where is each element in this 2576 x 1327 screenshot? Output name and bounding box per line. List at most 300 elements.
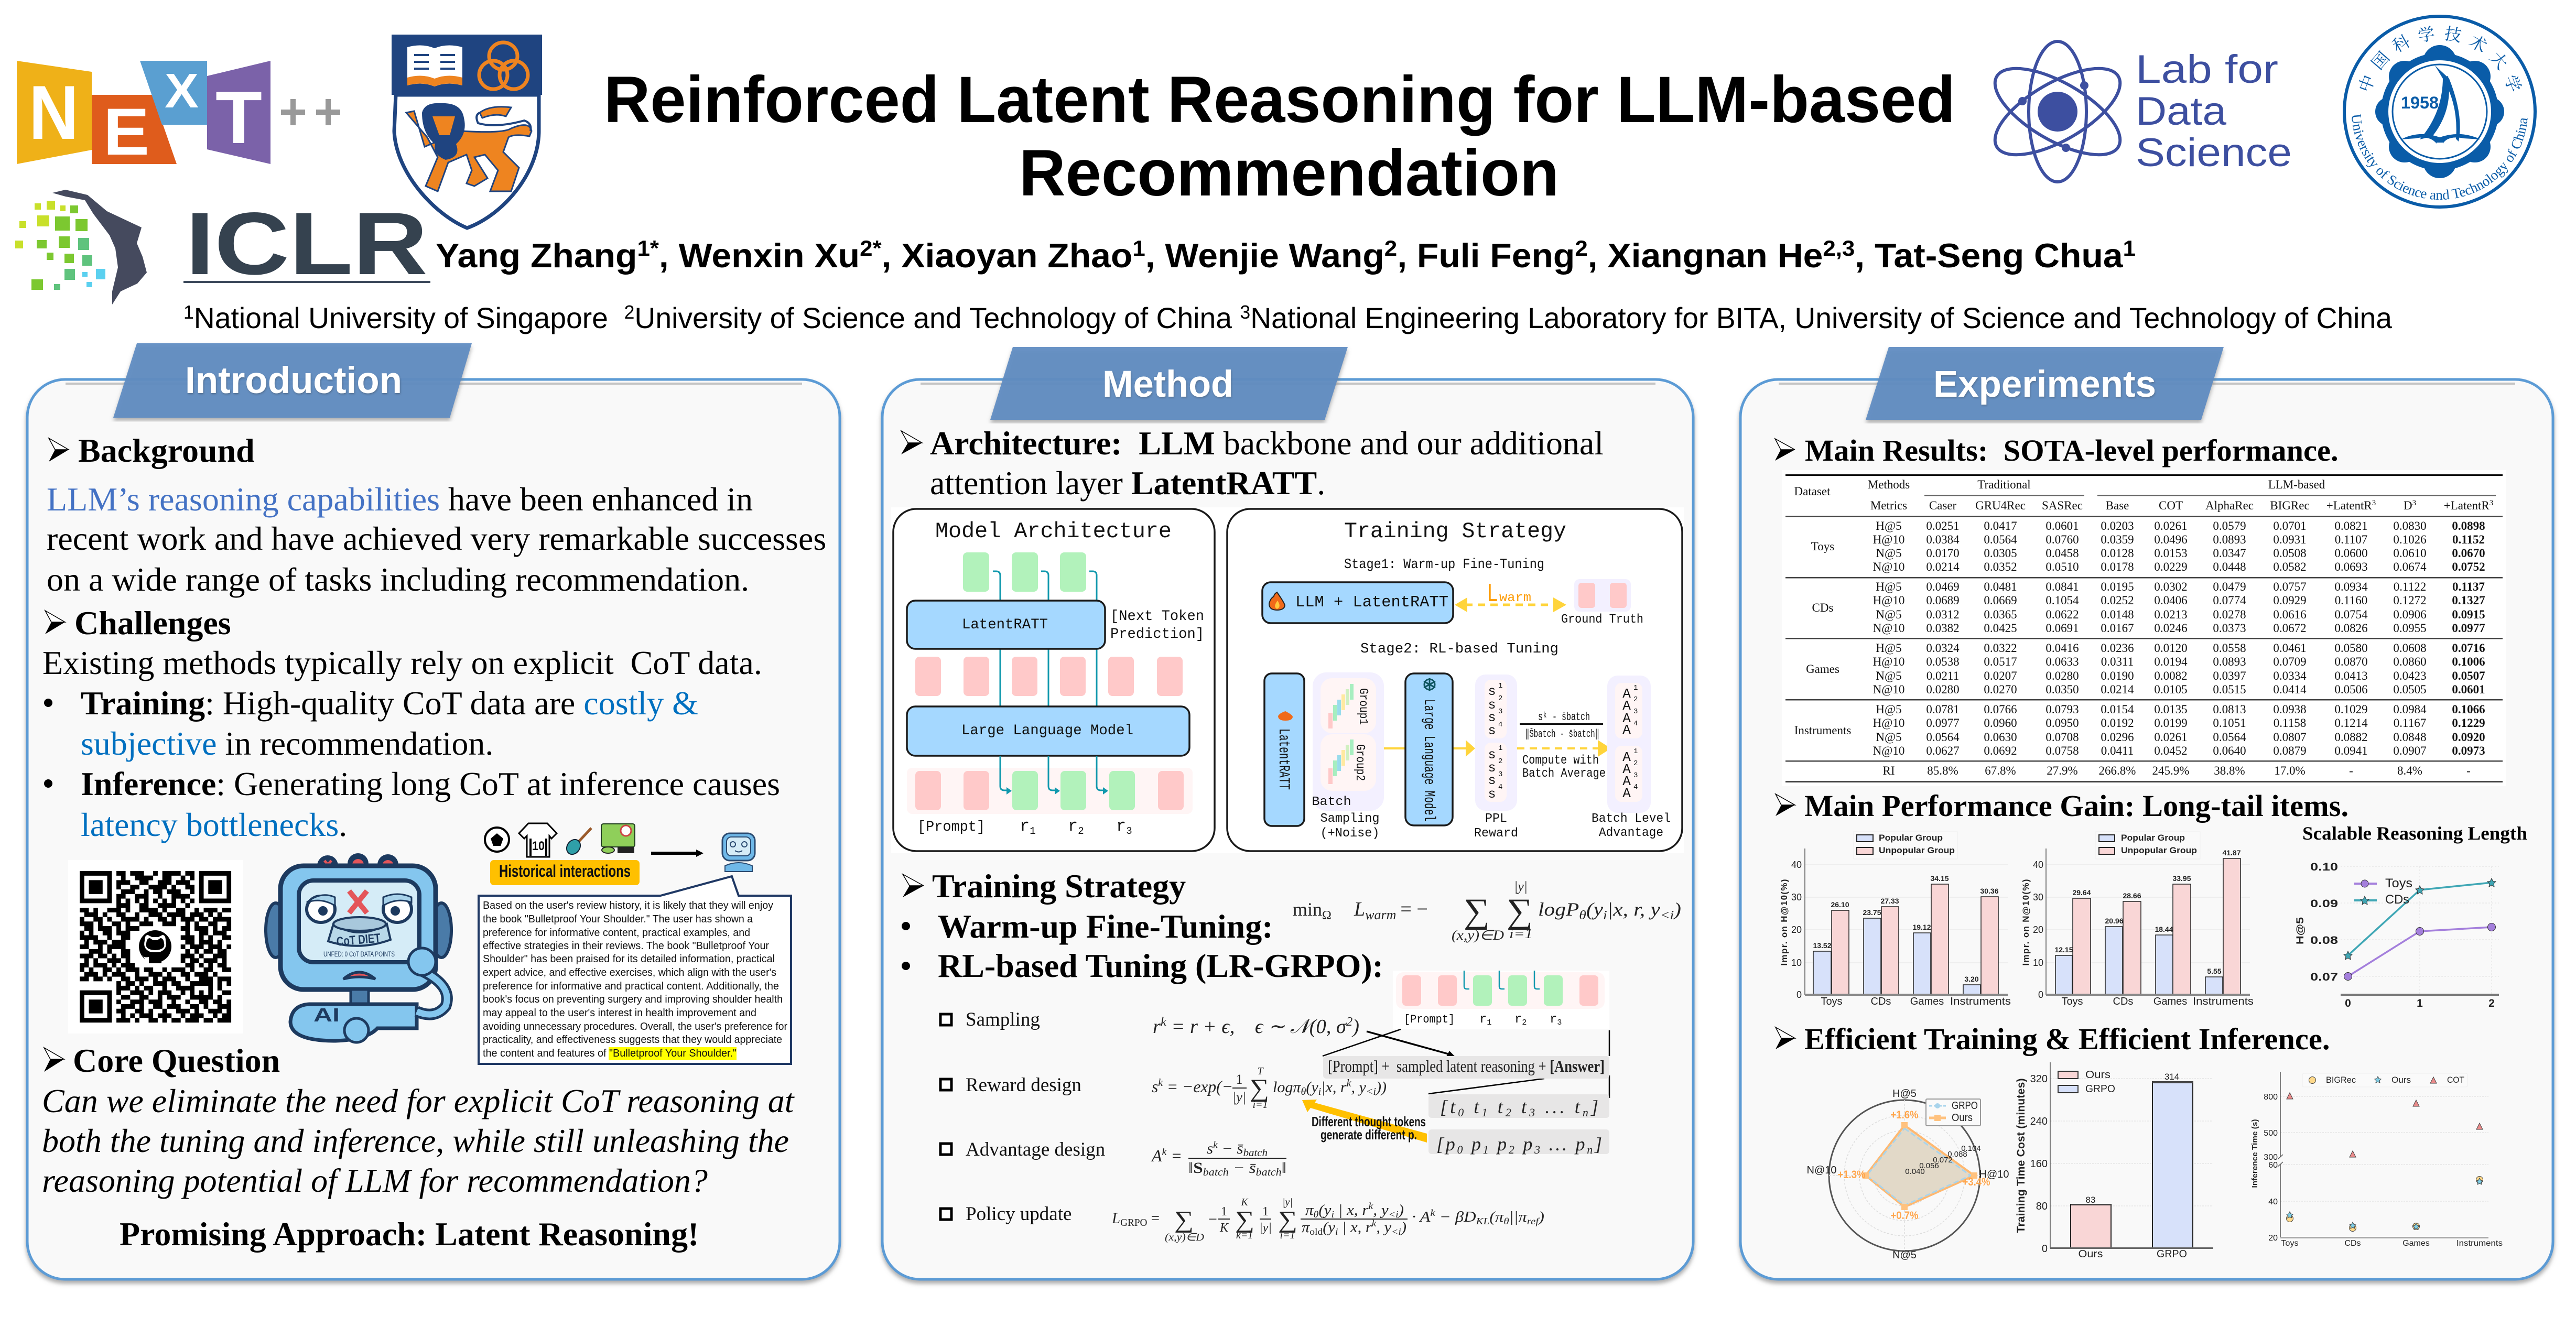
heading: Main Performance Gain: Main Performance Gain: Long-tail items. bbox=[1804, 789, 2348, 823]
table: main results: 0.0640 bbox=[2213, 744, 2246, 757]
table: main results: LLM-based bbox=[2268, 478, 2325, 491]
token box: p tokens: ... p bbox=[1542, 1134, 1585, 1155]
step: Policy update: <i bbox=[1391, 1226, 1401, 1237]
table: main results: 0.1029 bbox=[2334, 703, 2368, 716]
scatter chart: inference time: 800 bbox=[2264, 1093, 2278, 1102]
table: main results: 0.0709 bbox=[2273, 655, 2307, 668]
token box: p tokens: 0 bbox=[1457, 1143, 1463, 1156]
table: main results: 0.1160 bbox=[2335, 594, 2367, 607]
step: Policy update: K bbox=[1240, 1197, 1249, 1208]
authors: , Xiangnan He bbox=[1588, 236, 1823, 275]
table: main results: 0.0384 bbox=[1926, 533, 1960, 546]
table: main results: 0.0229 bbox=[2154, 560, 2188, 573]
formula: warm-up loss bbox=[1293, 879, 1681, 943]
table: main results: 0.0898 bbox=[2452, 519, 2485, 532]
scatter chart: inference time bbox=[2250, 1072, 2503, 1248]
PPL reward tokens: 3 bbox=[1498, 770, 1502, 779]
arrow: L warm loss bbox=[1455, 580, 1566, 612]
banner: Method: Method bbox=[1102, 364, 1233, 405]
step: Advantage design: ‖ bbox=[1282, 1159, 1286, 1177]
legend bbox=[2058, 1069, 2115, 1095]
table: main results: N@10 bbox=[1873, 560, 1904, 573]
logo: NExT++ bbox=[17, 61, 340, 169]
table: main results: 0.0261 bbox=[2154, 731, 2188, 744]
step: Reward design: 1 bbox=[1236, 1072, 1242, 1087]
line chart: scalable reasoning length bbox=[2295, 823, 2527, 1009]
heading: Architecture: attention layer LatentRATT. bbox=[930, 464, 1325, 502]
bar chart: improvement on N@10: 0 bbox=[2038, 989, 2043, 1000]
table: main results: 0.0692 bbox=[1984, 744, 2017, 757]
table: main results: 0.0350 bbox=[2045, 683, 2079, 696]
token box: t tokens: 1 bbox=[1482, 1106, 1488, 1119]
table: main results: 0.1006 bbox=[2452, 655, 2485, 668]
formula: warm-up loss: min bbox=[1293, 899, 1322, 920]
step: Policy update: π bbox=[1305, 1202, 1313, 1219]
logo: Lab for Data Science: Lab for bbox=[2136, 47, 2278, 92]
token strip inset bbox=[1393, 971, 1609, 1029]
block: LLM + LatentRATT: LLM + LatentRATT bbox=[1295, 593, 1448, 612]
bar chart: improvement on N@10: Impr. on N@10(%) bbox=[2021, 879, 2031, 965]
step: Advantage design: A bbox=[1152, 1146, 1162, 1165]
PPL reward tokens: s bbox=[1488, 773, 1496, 788]
table: main results: 0.0950 bbox=[2045, 716, 2079, 730]
line chart: scalable reasoning length: 2 bbox=[2488, 997, 2495, 1009]
connector lines to sampled reasoning bbox=[1323, 1029, 1609, 1098]
batch level advantage tokens: A bbox=[1622, 786, 1631, 801]
bar chart: improvement on H@10: Impr. on H@10(%) bbox=[1779, 879, 1789, 965]
title bbox=[604, 63, 1955, 210]
table: main results: 0.0600 bbox=[2334, 547, 2368, 560]
line chart: scalable reasoning length: 0.10 bbox=[2310, 861, 2338, 873]
step: Policy update: L bbox=[1112, 1210, 1121, 1227]
illustration: sad CoT diet robot bbox=[266, 853, 451, 1042]
table: main results: 0.0807 bbox=[2273, 731, 2307, 744]
radar chart: N@10 bbox=[1806, 1165, 1837, 1176]
scatter chart: inference time: CDs bbox=[2344, 1239, 2361, 1248]
line chart: scalable reasoning length: Scalable Reasoning Length bbox=[2302, 823, 2527, 844]
token strip inset: r bbox=[1479, 1013, 1487, 1027]
table: main results: 0.0821 bbox=[2334, 519, 2368, 532]
scatter chart: inference time: 500 bbox=[2264, 1129, 2278, 1138]
step: Policy update: , y bbox=[1376, 1220, 1392, 1236]
table: main results: Toys bbox=[1811, 540, 1834, 553]
step: Reward design: = −exp(− bbox=[1163, 1077, 1233, 1096]
step: Policy update: Policy update bbox=[966, 1203, 1071, 1225]
legend: GRPO bbox=[2085, 1083, 2115, 1095]
step: Advantage design: ‖S bbox=[1188, 1159, 1202, 1177]
illustration: sad CoT diet robot: CoT DIET bbox=[336, 931, 381, 949]
scatter chart: inference time: 40 bbox=[2268, 1198, 2278, 1206]
step: Reward design: (y bbox=[1306, 1079, 1318, 1096]
step: Advantage design: − s̄ bbox=[1218, 1140, 1243, 1157]
text: challenges list bbox=[42, 644, 780, 843]
icons: historical interaction items bbox=[485, 823, 635, 857]
step: Policy update: 1 bbox=[1262, 1205, 1269, 1219]
legend: Unpopular Group bbox=[1879, 845, 1955, 855]
token strip inset: r bbox=[1514, 1013, 1522, 1027]
radar chart: 0.056 bbox=[1919, 1161, 1939, 1170]
table: main results: 0.0416 bbox=[2045, 641, 2079, 655]
table: main results: 0.0938 bbox=[2273, 703, 2307, 716]
step: Policy update: θ bbox=[1314, 1209, 1319, 1220]
arrow: batch through LLM bbox=[1384, 740, 1475, 757]
step: Policy update bbox=[940, 1197, 1544, 1243]
authors: Yang Zhang bbox=[436, 236, 629, 275]
table: main results: 0.0214 bbox=[1926, 560, 1960, 573]
step: Policy update: ) bbox=[1400, 1220, 1406, 1236]
PPL reward tokens: s bbox=[1488, 710, 1496, 725]
bar chart: improvement on H@10: 20 bbox=[1791, 924, 1802, 935]
token box: p tokens: ] bbox=[1594, 1134, 1602, 1155]
bar chart: training time cost: 320 bbox=[2030, 1073, 2048, 1085]
table: main results: 0.0564 bbox=[1984, 533, 2017, 546]
table: main results: 67.8% bbox=[1985, 764, 2016, 777]
table: main results: 0.0148 bbox=[2101, 608, 2134, 621]
table: main results: N@5 bbox=[1876, 547, 1902, 560]
table: main results: 0.0622 bbox=[2045, 608, 2079, 621]
PPL reward tokens: Reward bbox=[1474, 826, 1518, 841]
PPL reward tokens: s bbox=[1488, 760, 1496, 776]
text: background paragraph: LLM’s reasoning capabilities have been enhanced in bbox=[47, 481, 753, 518]
PPL reward tokens: 4 bbox=[1498, 783, 1502, 791]
panel: method bbox=[882, 347, 1693, 1279]
table: main results: H@5 bbox=[1876, 703, 1902, 716]
table: main results: 0.0616 bbox=[2273, 608, 2307, 621]
bar chart: improvement on H@10: Games bbox=[1910, 996, 1944, 1007]
formula: warm-up loss: i bbox=[1603, 909, 1607, 922]
step: Reward design: k bbox=[1347, 1078, 1352, 1089]
bar chart: improvement on H@10: 27.33 bbox=[1880, 897, 1899, 905]
radar chart: 0.072 bbox=[1933, 1156, 1953, 1165]
table: main results: 0.0365 bbox=[1984, 608, 2017, 621]
PPL reward tokens: s bbox=[1488, 684, 1496, 699]
authors: 2* bbox=[860, 236, 882, 260]
PPL reward tokens: s bbox=[1488, 723, 1496, 738]
step: Advantage design: batch bbox=[1256, 1167, 1282, 1178]
table: main results: 0.0984 bbox=[2393, 703, 2427, 716]
table: main results: 0.0760 bbox=[2045, 533, 2079, 546]
table: main results: 0.0352 bbox=[1984, 560, 2017, 573]
table: main results: 0.0670 bbox=[2452, 547, 2485, 560]
radar chart bbox=[1806, 1088, 2009, 1261]
table: main results: 0.0879 bbox=[2273, 744, 2307, 757]
token box: t tokens: 2 bbox=[1506, 1106, 1511, 1119]
bar chart: improvement on N@10: 20 bbox=[2033, 924, 2043, 935]
table: main results: 0.0324 bbox=[1926, 641, 1960, 655]
legend: COT bbox=[2447, 1075, 2464, 1085]
step: Advantage design: k bbox=[1162, 1146, 1167, 1158]
table: main results: 0.0278 bbox=[2213, 608, 2246, 621]
table: main results: 0.0192 bbox=[2101, 716, 2134, 730]
token box: t tokens: t bbox=[1514, 1096, 1527, 1117]
authors: , Xiaoyan Zhao bbox=[882, 236, 1132, 275]
table: main results: 0.0213 bbox=[2154, 608, 2188, 621]
bar chart: improvement on N@10: 30 bbox=[2033, 892, 2043, 902]
table: main results: 0.0906 bbox=[2393, 608, 2427, 621]
scatter chart: inference time: Instruments bbox=[2456, 1239, 2503, 1248]
scatter chart: inference time: Inference Time (s) bbox=[2250, 1119, 2259, 1188]
advantage formula: Batch Average bbox=[1522, 767, 1606, 781]
formula: warm-up loss: ) bbox=[1673, 899, 1681, 920]
table: main results: 0.0190 bbox=[2101, 669, 2134, 682]
logo: NExT++: X bbox=[165, 63, 199, 118]
table: main results: 0.0322 bbox=[1984, 641, 2017, 655]
formula: warm-up loss: (y bbox=[1586, 899, 1603, 920]
bar chart: improvement on H@10: 34.15 bbox=[1930, 874, 1949, 883]
table: main results: 0.0505 bbox=[2393, 683, 2427, 696]
title: Recommendation bbox=[1019, 137, 1559, 210]
step: Policy update: ||π bbox=[1509, 1209, 1528, 1225]
table: main results: 0.0860 bbox=[2393, 655, 2427, 668]
table: main results: 0.0203 bbox=[2101, 519, 2134, 532]
table: main results: 8.4% bbox=[2397, 764, 2422, 777]
legend: Ours bbox=[2391, 1075, 2411, 1085]
bar chart: improvement on H@10: 40 bbox=[1791, 860, 1802, 870]
step: Reward design: , y bbox=[1351, 1079, 1367, 1096]
PPL reward tokens: 2 bbox=[1498, 694, 1502, 703]
token strip inset: [Prompt] bbox=[1404, 1013, 1455, 1026]
table: main results: 0.0669 bbox=[1984, 594, 2017, 607]
table: main results: 0.0199 bbox=[2154, 716, 2188, 730]
batch level advantage tokens: A bbox=[1622, 762, 1631, 777]
text: core question bbox=[42, 1082, 795, 1199]
PPL reward tokens bbox=[1474, 675, 1518, 841]
token box: t tokens: n bbox=[1583, 1106, 1588, 1119]
authors: 1 bbox=[1132, 236, 1145, 260]
radar chart: H@10 bbox=[1979, 1169, 2009, 1180]
table: main results: 85.8% bbox=[1927, 764, 1958, 777]
token box: p tokens: 3 bbox=[1534, 1143, 1540, 1156]
step: Sampling bbox=[940, 1009, 1359, 1038]
step: Reward design: k bbox=[1158, 1077, 1163, 1089]
bar chart: improvement on N@10: 40 bbox=[2033, 860, 2043, 870]
table: main results: 0.0813 bbox=[2213, 703, 2246, 716]
diagram: training strategy: Stage1: Warm-up Fine-Tuning bbox=[1344, 557, 1544, 573]
legend: Ours bbox=[1952, 1112, 1973, 1124]
table: main results: 0.1107 bbox=[2335, 533, 2367, 546]
radar chart: N@5 bbox=[1892, 1249, 1917, 1261]
table: main results: 0.0601 bbox=[2045, 519, 2079, 532]
ground truth tokens: Ground Truth bbox=[1561, 613, 1643, 627]
bar chart: improvement on N@10: 5.55 bbox=[2207, 967, 2222, 975]
table: main results: 38.8% bbox=[2214, 764, 2245, 777]
table: main results: 0.0413 bbox=[2334, 669, 2368, 682]
table: main results: 0.0496 bbox=[2154, 533, 2188, 546]
note: different thought tokens bbox=[1312, 1114, 1426, 1143]
table: main results: 0.0296 bbox=[2101, 731, 2134, 744]
step: Policy update: − bbox=[1208, 1211, 1217, 1228]
step: Reward design: T bbox=[1257, 1065, 1264, 1077]
step: Policy update: KL bbox=[1475, 1216, 1489, 1226]
table: main results: BIGRec bbox=[2270, 499, 2310, 512]
table: main results: 0.0630 bbox=[1984, 731, 2017, 744]
text: challenges list: Inference: Generating long CoT at inference causes bbox=[81, 765, 780, 802]
table: main results: 0.0689 bbox=[1926, 594, 1960, 607]
block: vertical Large Language Model: Large Language Model bbox=[1420, 699, 1437, 821]
bar chart: training time cost: GRPO bbox=[2157, 1248, 2187, 1260]
batch level advantage tokens bbox=[1592, 676, 1671, 840]
token box: p tokens: p bbox=[1490, 1134, 1507, 1155]
callout: generated explanation: the content and features of "Bulletproof Your Shoulder." bbox=[483, 1048, 737, 1059]
table: main results: 0.0305 bbox=[1984, 547, 2017, 560]
step: Policy update: ∑ bbox=[1235, 1206, 1254, 1233]
step: Policy update: − βD bbox=[1435, 1209, 1476, 1225]
list: tuning bullets bbox=[902, 908, 1383, 984]
affiliations: University of Science and Technology of China bbox=[634, 301, 1240, 334]
list: tuning bullets: RL-based Tuning (LR-GRPO): bbox=[938, 947, 1383, 984]
PPL reward tokens: s bbox=[1488, 698, 1496, 713]
scatter chart: inference time: 60 bbox=[2268, 1161, 2278, 1170]
step: Reward design: logπ bbox=[1273, 1079, 1301, 1096]
table: main results: H@10 bbox=[1873, 594, 1904, 607]
formula: warm-up loss: L bbox=[1354, 898, 1365, 920]
step: Policy update: | x, r bbox=[1334, 1202, 1369, 1219]
heading: Training Strategy: Training Strategy bbox=[932, 867, 1186, 905]
table: main results: 0.0931 bbox=[2273, 533, 2307, 546]
advantage formula: sᵏ - s̄batch bbox=[1538, 711, 1590, 724]
table: main results: - bbox=[2349, 764, 2353, 777]
illustration: sad CoT diet robot: AI bbox=[313, 1004, 340, 1026]
table: main results: 0.0870 bbox=[2334, 655, 2368, 668]
formula: warm-up loss: <i bbox=[1660, 909, 1674, 922]
legend: Popular Group bbox=[2121, 833, 2185, 843]
PPL reward tokens: 1 bbox=[1498, 744, 1502, 753]
legend bbox=[2302, 1073, 2467, 1087]
block: vertical LatentRATT: LatentRATT bbox=[1274, 728, 1292, 790]
heading: Architecture: Architecture: LLM backbone and our additional bbox=[930, 425, 1604, 462]
step: Policy update: i bbox=[1335, 1226, 1338, 1237]
table: main results: 0.0564 bbox=[1926, 731, 1960, 744]
authors: 1 bbox=[2123, 236, 2136, 260]
callout: generated explanation: may appeal to the user's interest in health improvement and bbox=[483, 1007, 756, 1019]
radar chart: +1.3% bbox=[1838, 1169, 1866, 1181]
label: Historical interactions bbox=[490, 860, 640, 885]
step: Reward design: s bbox=[1152, 1077, 1158, 1096]
table: main results: H@10 bbox=[1873, 533, 1904, 546]
table: main results: 245.9% bbox=[2152, 764, 2189, 777]
block: vertical LatentRATT bbox=[1264, 673, 1304, 826]
table: main results: 0.0672 bbox=[2273, 622, 2307, 635]
step: Policy update: k=1 bbox=[1236, 1230, 1253, 1241]
text: core question: both the tuning and inference, while still unleashing the bbox=[42, 1122, 789, 1159]
table: main results: 0.0406 bbox=[2154, 594, 2188, 607]
radar chart: H@5 bbox=[1892, 1088, 1917, 1100]
bar chart: improvement on N@10: 41.87 bbox=[2222, 849, 2241, 857]
table: main results: 0.0507 bbox=[2452, 669, 2485, 682]
step: Policy update: (x,y)∈D bbox=[1165, 1232, 1205, 1243]
bar chart: training time cost: 240 bbox=[2030, 1116, 2048, 1127]
logo: NExT++: N bbox=[29, 70, 79, 155]
step: Sampling: 2 bbox=[1346, 1015, 1352, 1029]
logo: USTC seal: 1958 bbox=[2401, 93, 2439, 112]
step: Sampling: Sampling bbox=[966, 1009, 1040, 1030]
panel: introduction bbox=[27, 343, 840, 1279]
step: Policy update: 1 bbox=[1221, 1205, 1227, 1219]
line chart: scalable reasoning length: 0 bbox=[2345, 997, 2351, 1009]
table: main results: 0.0236 bbox=[2101, 641, 2134, 655]
table: main results: 0.0280 bbox=[2045, 669, 2079, 682]
advantage formula: Compute with bbox=[1522, 754, 1599, 768]
step: Policy update: ) bbox=[1538, 1209, 1544, 1225]
table: main results: 0.0579 bbox=[2213, 519, 2246, 532]
batch sampling block bbox=[1312, 672, 1384, 841]
advantage formula bbox=[1517, 711, 1611, 781]
batch level advantage tokens: 4 bbox=[1633, 720, 1638, 728]
table: main results: 0.0708 bbox=[2045, 731, 2079, 744]
bar chart: improvement on N@10: 10 bbox=[2033, 958, 2043, 968]
bar chart: improvement on H@10: 26.10 bbox=[1831, 900, 1849, 909]
logo: NExT++: E bbox=[103, 94, 149, 169]
table: main results: 0.0246 bbox=[2154, 622, 2188, 635]
table: main results: 0.0311 bbox=[2101, 655, 2134, 668]
bar chart: training time cost: Training Time Cost (minutes) bbox=[2015, 1079, 2027, 1233]
table: main results: 0.0826 bbox=[2334, 622, 2368, 635]
step: Advantage design: Advantage design bbox=[966, 1139, 1105, 1160]
table: main results: 0.0893 bbox=[2213, 655, 2246, 668]
formula: warm-up loss: i=1 bbox=[1509, 926, 1533, 941]
callout: generated explanation: book's focus on preventing surgery and improving shoulder health bbox=[483, 994, 783, 1005]
legend: GRPO bbox=[1952, 1100, 1978, 1112]
table: main results: 0.0841 bbox=[2045, 580, 2079, 593]
step: Advantage design: batch bbox=[1243, 1147, 1268, 1159]
table: main results: 0.1054 bbox=[2045, 594, 2079, 607]
batch sampling block: Sampling bbox=[1320, 812, 1380, 826]
table: main results: 0.0758 bbox=[2045, 744, 2079, 757]
table: main results: H@10 bbox=[1873, 716, 1904, 730]
table: main results: N@10 bbox=[1873, 683, 1904, 696]
step: Reward design: ∑ bbox=[1250, 1074, 1269, 1102]
token box: p tokens: p bbox=[1465, 1134, 1481, 1155]
table: main results: 0.0955 bbox=[2393, 622, 2427, 635]
table: main results: 0.0915 bbox=[2452, 608, 2485, 621]
banner: Experiments: Experiments bbox=[1933, 364, 2156, 405]
callout: generated explanation: the book "Bulletproof Your Shoulder." The user has shown a bbox=[483, 913, 753, 925]
bar chart: improvement on N@10 bbox=[2021, 832, 2254, 1007]
table: main results: 0.0120 bbox=[2154, 641, 2188, 655]
radar chart: 0.040 bbox=[1905, 1167, 1925, 1176]
radar chart: +3.4% bbox=[1963, 1176, 1990, 1188]
table: main results: COT bbox=[2159, 499, 2183, 512]
table: main results: 0.0674 bbox=[2393, 560, 2427, 573]
batch sampling block: Group1 bbox=[1356, 688, 1370, 725]
bar chart: improvement on H@10: 10 bbox=[1791, 958, 1802, 968]
list: tuning bullets: Warm-up Fine-Tuning: bbox=[938, 908, 1273, 945]
ground truth tokens bbox=[1561, 579, 1643, 627]
logo: USTC seal: University of Science and Technology of China bbox=[2352, 114, 2528, 200]
bar chart: improvement on N@10: 29.64 bbox=[2072, 888, 2091, 897]
step: Policy update: π bbox=[1302, 1220, 1309, 1236]
batch level advantage tokens: 3 bbox=[1633, 708, 1638, 716]
table: main results: 0.0508 bbox=[2273, 547, 2307, 560]
step: Sampling: = r + ϵ, ϵ ∼ 𝒩(0, σ bbox=[1166, 1016, 1347, 1038]
table: main results: H@10 bbox=[1873, 655, 1904, 668]
table: main results: 0.0195 bbox=[2101, 580, 2134, 593]
table: main results: 0.0848 bbox=[2393, 731, 2427, 744]
bar chart: improvement on H@10: 23.75 bbox=[1863, 908, 1881, 917]
table: main results: D bbox=[2404, 499, 2412, 512]
table: main results: - bbox=[2466, 764, 2471, 777]
table: main results: 0.0479 bbox=[2213, 580, 2246, 593]
bar chart: improvement on N@10: CDs bbox=[2113, 996, 2133, 1007]
token box: p tokens bbox=[1428, 1129, 1609, 1156]
step: Policy update: k bbox=[1431, 1208, 1436, 1218]
table: main results: N@5 bbox=[1876, 608, 1902, 621]
diagram: model architecture bbox=[893, 509, 1215, 851]
step: Policy update: · A bbox=[1412, 1209, 1428, 1225]
table: main results: CDs bbox=[1812, 601, 1833, 614]
icon: small robot bbox=[722, 833, 755, 872]
table: main results: 0.0082 bbox=[2154, 669, 2188, 682]
